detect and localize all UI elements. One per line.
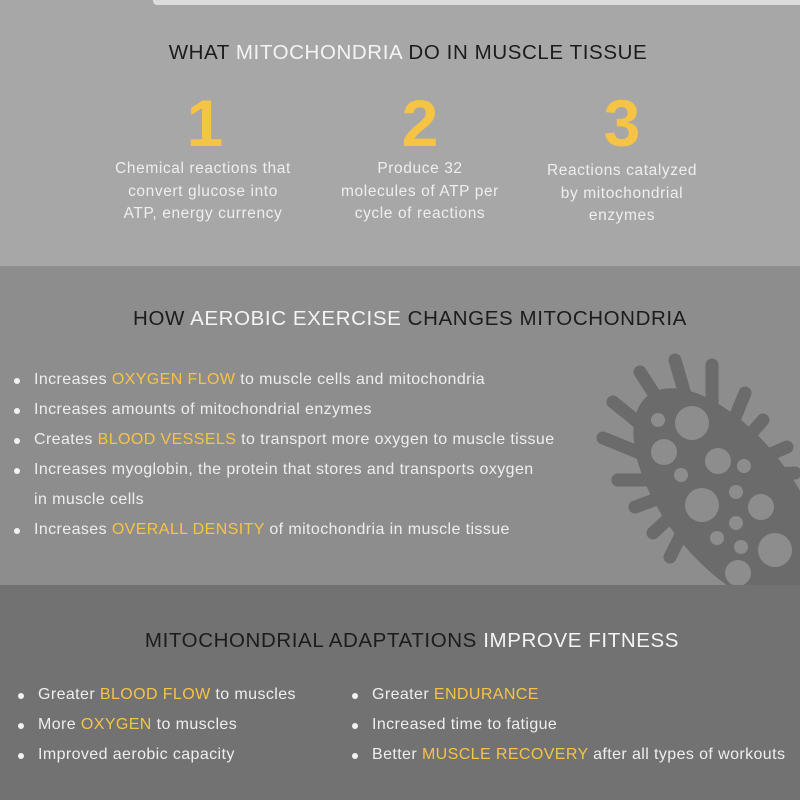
heading 3: MITOCHONDRIAL ADAPTATIONS IMPROVE FITNESS [145,629,679,652]
text 3 [547,162,697,224]
number 3: 3 [604,86,640,160]
bullet list 2 [14,371,555,538]
text 1: convert glucose into [128,182,278,200]
text 1 [115,160,291,222]
bullet list 2: Increases myoglobin, the protein that stores and transports oxygen [34,461,534,478]
bullet list right: Better MUSCLE RECOVERY after all types of workouts [372,746,785,763]
bullet list right [352,686,785,763]
heading 1: WHAT MITOCHONDRIA DO IN MUSCLE TISSUE [169,41,647,64]
text 3: by mitochondrial [561,184,683,202]
text 3: enzymes [589,207,655,224]
text 2: molecules of ATP per [341,182,499,200]
bullet list 2: Increases OXYGEN FLOW to muscle cells and mitochondria [34,371,485,388]
bullet list left: Greater BLOOD FLOW to muscles [38,686,296,703]
text 2: Produce 32 [377,160,463,177]
number 2: 2 [402,86,438,160]
bullet list right: Greater ENDURANCE [372,686,539,703]
number 1: 1 [187,86,223,160]
panel: what mitochondria do [0,0,800,266]
bullet list 2: in muscle cells [34,491,144,508]
text 1: ATP, energy currency [124,205,282,222]
text 3: Reactions catalyzed [547,162,697,179]
text 1: Chemical reactions that [115,160,291,177]
bullet list right: Increased time to fatigue [372,716,557,733]
icon: mitochondrion [596,354,800,585]
panel: aerobic exercise [0,266,800,585]
bullet list 2: Increases OVERALL DENSITY of mitochondria in muscle tissue [34,521,510,538]
bullet list left [18,686,296,763]
text 2: cycle of reactions [355,205,485,222]
bullet list left: Improved aerobic capacity [38,746,235,763]
bullet list 2: Increases amounts of mitochondrial enzymes [34,401,372,418]
text 2 [341,160,499,222]
bullet list 2: Creates BLOOD VESSELS to transport more oxygen to muscle tissue [34,431,555,448]
top strip [153,0,800,5]
bullet list left: More OXYGEN to muscles [38,716,237,733]
panel: adaptations [0,585,800,800]
heading 2: HOW AEROBIC EXERCISE CHANGES MITOCHONDRIA [133,307,687,330]
